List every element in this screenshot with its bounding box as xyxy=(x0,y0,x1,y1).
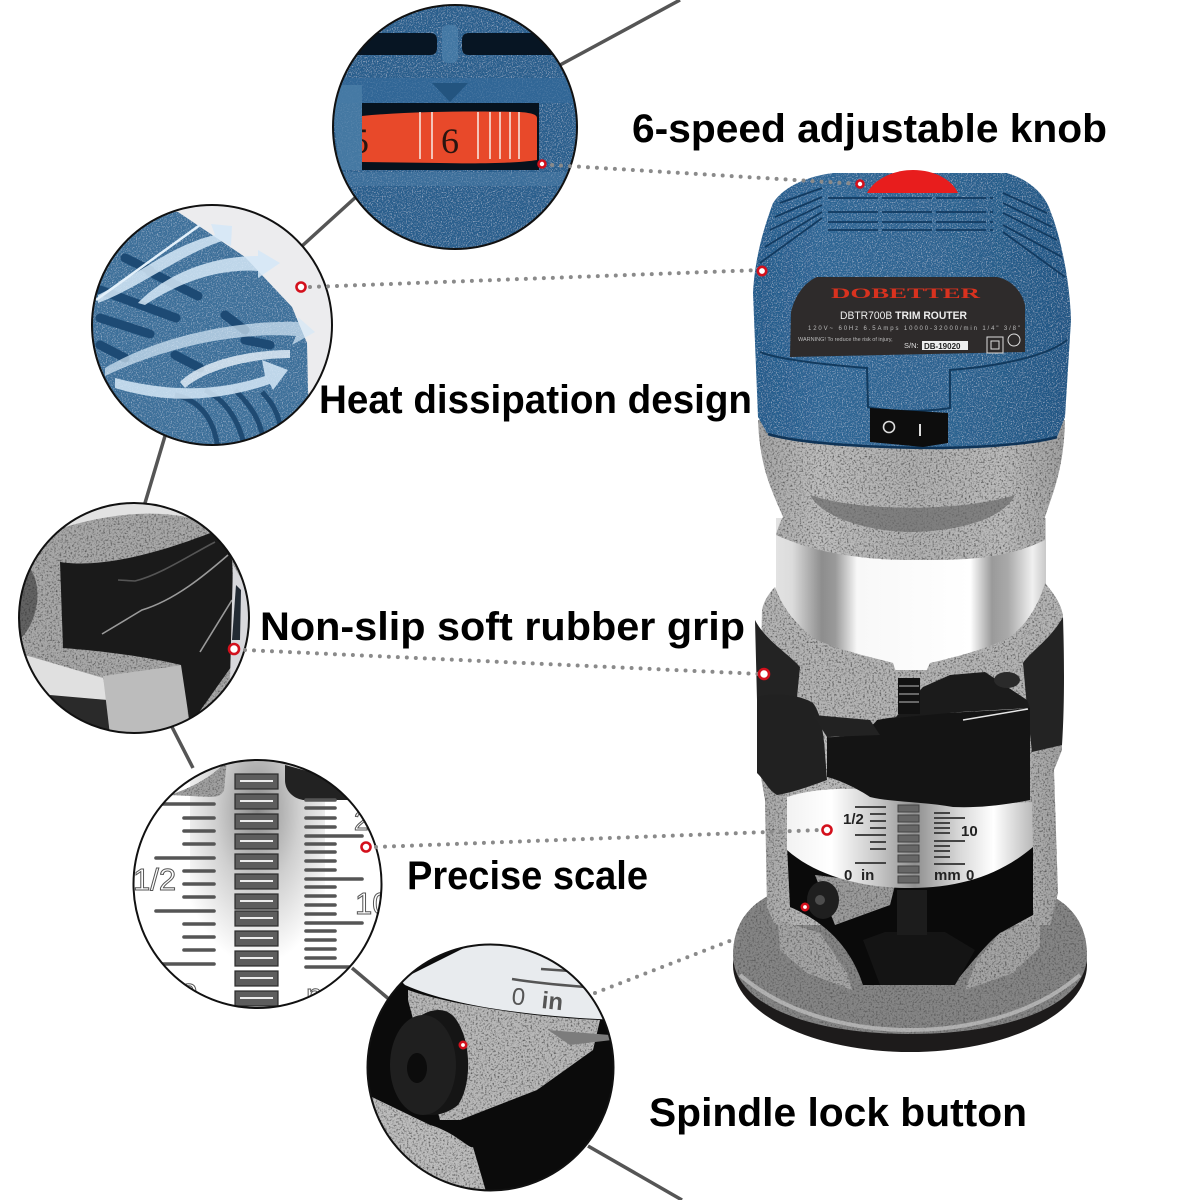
silver depth scale band xyxy=(787,789,1033,888)
left speckled edge xyxy=(333,85,362,170)
label: spindle lock button: Spindle lock button xyxy=(649,1091,1027,1135)
power switch xyxy=(870,408,948,447)
circle: heat dissipation detail xyxy=(90,205,334,450)
spindle lock button xyxy=(807,881,839,919)
silver right edge xyxy=(230,565,248,680)
grip accents xyxy=(102,542,232,695)
rib highlight xyxy=(442,25,458,63)
metal corners xyxy=(172,765,226,797)
silver lower left strip xyxy=(25,655,108,700)
serial number: S/N: xyxy=(904,341,919,350)
scale numbers: 10 xyxy=(961,823,978,840)
outlined scale numbers: 10 xyxy=(355,886,389,921)
metal ring around cylinder xyxy=(760,583,1063,725)
warning text: WARNING! To reduce the risk of injury, xyxy=(798,337,893,343)
circle outline: scale xyxy=(134,760,382,1008)
lower curved ribs xyxy=(175,390,283,450)
model text: DBTR700B TRIM ROUTER xyxy=(840,310,967,322)
circle outline: spindle xyxy=(368,944,614,1190)
specs text: 120V~ 60Hz 6.5Amps 10000-32000/min 1/4" 3/8" xyxy=(808,326,1020,332)
orange knob dial xyxy=(351,111,537,163)
scale ticks xyxy=(512,969,585,987)
circle outline: knob xyxy=(333,5,577,249)
base feet xyxy=(778,917,1040,990)
scale centre column xyxy=(898,805,919,883)
scale ticks xyxy=(855,807,965,864)
knob window xyxy=(362,103,539,170)
red markers xyxy=(229,160,864,1048)
outlined scale numbers: 2 xyxy=(354,806,368,836)
dotted leader lines xyxy=(245,165,860,993)
outlined scale numbers: 1/2 xyxy=(133,862,176,897)
silver scale surface xyxy=(402,946,603,1020)
circle: precise scale detail xyxy=(133,760,389,1012)
scale numbers: 0 xyxy=(966,867,974,884)
metal collar xyxy=(758,420,1065,560)
label: precise scale: Precise scale xyxy=(407,854,648,898)
outlined scale numbers: m xyxy=(306,977,332,1012)
circle outline: heat xyxy=(92,205,332,445)
metal block xyxy=(408,990,600,1120)
blue motor housing xyxy=(753,173,1071,448)
black clamp lever xyxy=(757,672,1030,807)
millimetre ticks xyxy=(306,800,362,967)
vent slots xyxy=(358,33,552,55)
circle: rubber grip detail xyxy=(19,497,249,735)
lower metal block xyxy=(103,665,190,735)
outlined scale numbers: o xyxy=(180,972,197,1007)
scale numbers: in xyxy=(861,867,874,884)
orange knob dial: 5 xyxy=(351,121,369,161)
brand name: DOBETTER xyxy=(831,286,980,302)
certification marks xyxy=(987,334,1020,353)
silver cylinder xyxy=(776,518,1046,670)
scale column xyxy=(235,774,278,1006)
dark opening with spindle and nut xyxy=(787,845,1033,985)
label: non-slip soft rubber grip: Non-slip soft rubber grip xyxy=(260,605,745,649)
raised panel seam xyxy=(760,340,1067,411)
silver foot xyxy=(372,1097,487,1195)
black spindle button xyxy=(390,1010,468,1115)
outlined scale numbers xyxy=(134,812,380,996)
product label plate xyxy=(790,277,1025,357)
non-slip rubber grips xyxy=(755,617,1064,752)
airflow arrows xyxy=(96,224,315,399)
connector lines between circles xyxy=(145,0,682,1200)
inch ticks xyxy=(156,804,214,964)
product: trim router xyxy=(733,170,1087,1052)
scale text xyxy=(512,988,562,1010)
scale text: 0 xyxy=(510,983,526,1011)
collar shadow xyxy=(810,495,1015,532)
orange knob dial: 6 xyxy=(441,121,459,161)
circle: spindle lock detail xyxy=(367,945,620,1195)
column highlights xyxy=(240,781,273,998)
circle: speed knob detail xyxy=(333,3,578,250)
band above window xyxy=(333,78,577,103)
scale text: in xyxy=(540,987,564,1016)
scale numbers: 0 xyxy=(844,867,852,884)
black grip xyxy=(60,530,236,725)
dark vent slots xyxy=(100,258,270,368)
label: 6-speed adjustable knob: 6-speed adjustable knob xyxy=(632,107,1107,151)
lighter band below window xyxy=(333,172,577,186)
circle outline: grip xyxy=(19,503,249,733)
serial number xyxy=(904,341,968,351)
scale numbers xyxy=(843,811,978,884)
serial number: DB-19020 xyxy=(924,342,961,351)
router base plate xyxy=(733,878,1087,1052)
scale numbers: 1/2 xyxy=(843,811,864,828)
label: heat dissipation design: Heat dissipation design xyxy=(319,378,752,422)
vent ribs xyxy=(760,188,1065,277)
pointer triangle xyxy=(432,83,468,102)
speed knob on housing xyxy=(867,170,958,193)
scale numbers: mm xyxy=(934,867,961,884)
router column housing xyxy=(758,650,1062,925)
